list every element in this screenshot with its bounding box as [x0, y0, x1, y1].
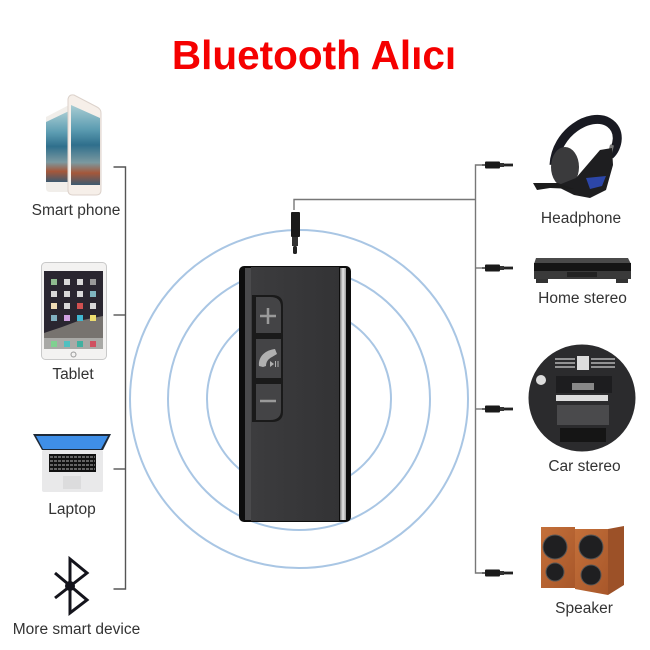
label: smart phone: Smart phone	[32, 202, 120, 219]
title: Bluetooth Alıcı	[172, 32, 456, 78]
audio jack: home stereo	[482, 264, 513, 272]
signal rings	[130, 230, 468, 568]
label: more smart device: More smart device	[13, 621, 140, 638]
right connector lines	[294, 165, 484, 573]
label: speaker: Speaker	[555, 600, 613, 617]
icon: smart phones	[46, 95, 101, 195]
label: car stereo: Car stereo	[548, 458, 621, 475]
left connector bracket	[114, 167, 126, 589]
label: laptop: Laptop	[48, 501, 96, 518]
bluetooth receiver device	[239, 266, 351, 522]
button: plus	[256, 297, 281, 333]
output cable plug	[291, 212, 300, 254]
icon: headset	[533, 119, 617, 198]
icon: home stereo	[534, 258, 631, 283]
audio jack: car stereo	[482, 406, 513, 412]
icon: speakers	[541, 526, 624, 595]
label: tablet: Tablet	[52, 366, 94, 383]
device button panel	[252, 295, 283, 422]
icon: bluetooth symbol	[55, 559, 87, 613]
audio jack: speaker	[482, 570, 513, 576]
audio jack: headphone	[482, 162, 513, 168]
icon: tablet	[42, 262, 106, 360]
icon: laptop	[33, 434, 111, 492]
label: home stereo: Home stereo	[538, 290, 627, 307]
button: minus	[256, 384, 281, 420]
button: call and play	[256, 339, 281, 378]
label: headphone: Headphone	[541, 210, 621, 227]
icon: car stereo	[528, 344, 636, 452]
